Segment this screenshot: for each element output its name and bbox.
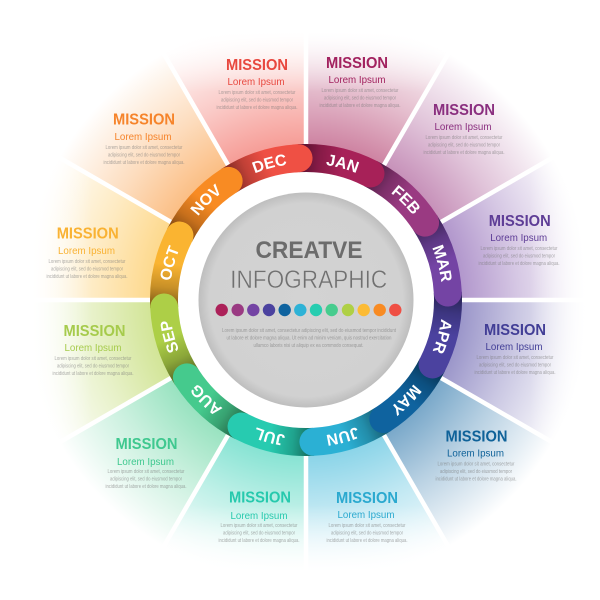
text: AUG: Lorem Ipsum — [117, 456, 174, 468]
segment: AUG: AUG — [192, 385, 222, 414]
text: OCT: MISSION — [57, 226, 119, 243]
text: JUN — [326, 490, 408, 544]
text: SEP: adipiscing elit, sed do eiusmod tempor — [57, 364, 129, 370]
center body text: ullamco laboris nisi ut aliquip ex ea commodo consequat. — [254, 343, 364, 349]
segment: DEC — [221, 144, 300, 193]
text: NOV: MISSION — [113, 112, 175, 129]
segment: OCT: OCT — [160, 245, 178, 280]
text: JUN: Lorem ipsum dolor sit amet, consectetur — [328, 523, 406, 529]
text: NOV: Lorem ipsum dolor sit amet, consectetur — [106, 145, 183, 151]
segment: NOV: NOV — [190, 184, 220, 216]
text: JAN: Lorem Ipsum — [328, 74, 386, 86]
segment: NOV — [167, 166, 243, 242]
text: JUN: incididunt ut labore et dolore magna aliqua. — [326, 538, 408, 544]
text: APR: Lorem Ipsum — [486, 341, 543, 353]
center body text: ut labore et dolore magna aliqua. Ut enim ad minim veniam, quis nostrud exercitation — [226, 336, 392, 342]
segment: JUL — [228, 412, 314, 456]
segment: JUN — [299, 407, 391, 456]
segment: JUN: JUN — [326, 428, 358, 446]
segment: MAR: MAR — [432, 244, 452, 282]
text: AUG: incididunt ut labore et dolore magna aliqua. — [106, 484, 186, 490]
text: JAN: adipiscing elit, sed do eiusmod tempor — [324, 96, 396, 102]
text: APR: incididunt ut labore et dolore magna aliqua. — [474, 370, 556, 376]
text: MAR — [478, 213, 560, 267]
text: NOV: adipiscing elit, sed do eiusmod tempor — [108, 152, 180, 158]
segment: MAY — [370, 358, 445, 433]
text: DEC: Lorem ipsum dolor sit amet, consectetur — [218, 90, 296, 96]
text: NOV — [104, 112, 184, 166]
text: MAR: Lorem ipsum dolor sit amet, consectetur — [480, 246, 558, 252]
segment: SEP: SEP — [160, 322, 178, 353]
text: DEC: incididunt ut labore et dolore magna aliqua. — [216, 105, 298, 111]
text: JAN: Lorem ipsum dolor sit amet, consectetur — [322, 88, 399, 94]
segment: FEB — [364, 161, 440, 237]
text: SEP: incididunt ut labore et dolore magna aliqua. — [52, 371, 134, 377]
text: MAY — [436, 428, 516, 482]
text: AUG — [106, 436, 186, 490]
center body text: Lorem ipsum dolor sit amet, consectetur adipiscing elit, sed do eiusmod tempor incididunt — [222, 328, 397, 334]
text: SEP — [52, 323, 134, 377]
segment: OCT — [150, 222, 194, 308]
text: JAN: incididunt ut labore et dolore magna aliqua. — [320, 103, 400, 109]
text: FEB: Lorem Ipsum — [434, 121, 492, 133]
text: JUL — [218, 490, 300, 544]
segment: JAN: JAN — [326, 154, 360, 173]
segment: MAY: MAY — [393, 384, 422, 416]
text: JUL: adipiscing elit, sed do eiusmod tempor — [223, 530, 295, 536]
segment: FEB: FEB — [392, 185, 420, 214]
segment: JAN — [298, 144, 384, 188]
text: MAY: Lorem ipsum dolor sit amet, consectetur — [438, 462, 515, 468]
heading: creative: CREATVE — [256, 237, 362, 264]
text: MAR: Lorem Ipsum — [490, 232, 547, 244]
text: FEB: adipiscing elit, sed do eiusmod tempor — [428, 142, 500, 148]
text: APR: adipiscing elit, sed do eiusmod tempor — [479, 362, 551, 368]
text: JUL: MISSION — [229, 490, 291, 506]
text: SEP: Lorem ipsum dolor sit amet, consectetur — [54, 356, 132, 362]
month ring — [150, 144, 462, 456]
text: FEB: incididunt ut labore et dolore magna aliqua. — [424, 150, 504, 156]
text: OCT: Lorem Ipsum — [58, 245, 115, 257]
colour dots — [216, 304, 401, 316]
heading: infographic: INFOGRAPHIC — [230, 266, 387, 294]
segment: APR: APR — [432, 319, 452, 354]
text: OCT: Lorem ipsum dolor sit amet, consectetur — [48, 259, 126, 265]
text: DEC — [216, 57, 298, 111]
text: MAY: MISSION — [446, 428, 508, 446]
text: MAY: Lorem Ipsum — [447, 448, 504, 460]
text: OCT: adipiscing elit, sed do eiusmod tempor — [51, 266, 123, 272]
text: JUN: adipiscing elit, sed do eiusmod tempor — [331, 530, 403, 536]
text: SEP: Lorem Ipsum — [64, 342, 122, 354]
text: MAY: incididunt ut labore et dolore magna aliqua. — [436, 476, 516, 482]
segment: DEC rounded tip — [282, 138, 318, 176]
text: AUG: Lorem ipsum dolor sit amet, consectetur — [108, 469, 185, 475]
text: OCT: incididunt ut labore et dolore magna aliqua. — [46, 274, 128, 280]
segment: AUG — [172, 363, 248, 439]
text: APR: MISSION — [484, 322, 546, 339]
text: JAN: MISSION — [326, 55, 388, 72]
text: APR — [474, 322, 556, 376]
text: MAR: incididunt ut labore et dolore magna aliqua. — [478, 261, 560, 267]
center body text — [222, 328, 397, 349]
text: DEC: adipiscing elit, sed do eiusmod tempor — [221, 98, 293, 104]
segment: SEP — [150, 294, 199, 385]
text: OCT — [46, 226, 128, 280]
center circle — [198, 192, 414, 408]
text: JUL: Lorem Ipsum — [230, 510, 288, 522]
text: JUN: Lorem Ipsum — [338, 509, 395, 521]
text: MAY: adipiscing elit, sed do eiusmod tempor — [440, 469, 512, 475]
text: APR: Lorem ipsum dolor sit amet, consectetur — [476, 355, 554, 361]
white ring — [176, 170, 436, 430]
segment: DEC: DEC — [252, 154, 286, 173]
text: DEC: MISSION — [226, 57, 288, 74]
segment: MAR — [413, 215, 462, 306]
text: JUL: Lorem ipsum dolor sit amet, consectetur — [220, 523, 298, 529]
text: NOV: incididunt ut labore et dolore magna aliqua. — [104, 160, 184, 166]
segment: JUL: JUL — [256, 427, 285, 446]
text: MAR: MISSION — [489, 213, 551, 230]
text: AUG: MISSION — [116, 436, 178, 453]
text: SEP: MISSION — [64, 323, 126, 340]
text: DEC: Lorem Ipsum — [228, 76, 285, 88]
text: JUN: MISSION — [336, 490, 398, 507]
text: AUG: adipiscing elit, sed do eiusmod tempor — [110, 476, 182, 482]
text: NOV: Lorem Ipsum — [114, 131, 172, 143]
text: JUL: incididunt ut labore et dolore magna aliqua. — [218, 538, 300, 544]
text: JAN — [320, 55, 400, 109]
text: FEB: MISSION — [433, 102, 495, 119]
text: MAR: adipiscing elit, sed do eiusmod tempor — [483, 254, 555, 260]
text: FEB — [424, 102, 504, 156]
segment: APR — [418, 292, 462, 378]
text: FEB: Lorem ipsum dolor sit amet, consectetur — [426, 135, 503, 141]
